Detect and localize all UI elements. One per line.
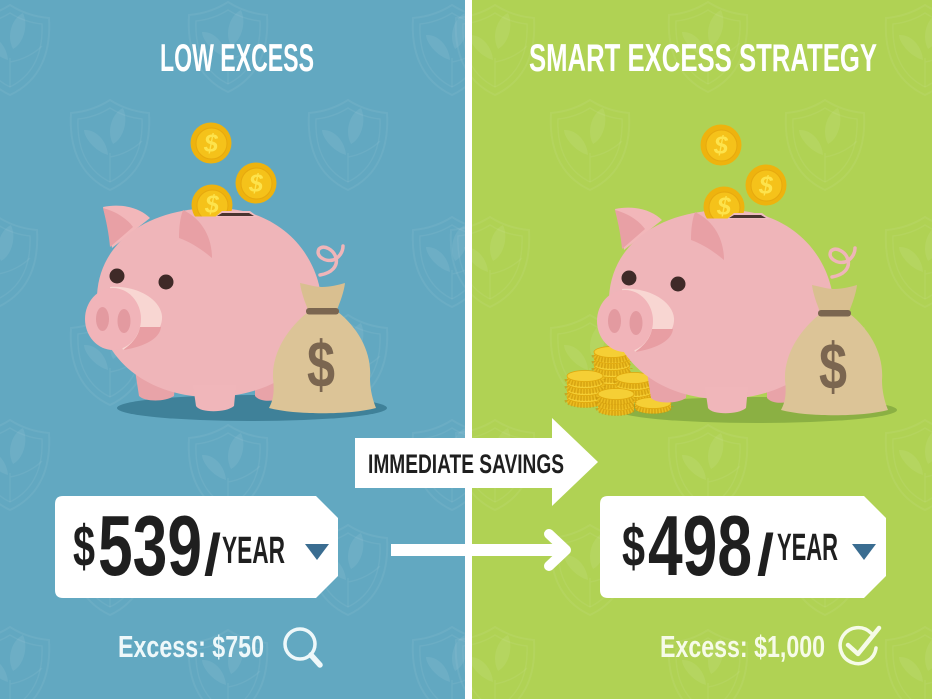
arrow: immediate savings banner (355, 418, 598, 506)
panel: low excess (0, 0, 491, 699)
illustration: piggy bank with coins: $ (204, 191, 220, 219)
illustration: piggy bank with coins: $ (203, 130, 219, 158)
divider (465, 0, 472, 699)
arrow: price comparison (391, 534, 566, 566)
price tag: $539 per year: / (204, 523, 221, 588)
illustration: piggy bank with coins: $ (248, 170, 264, 198)
illustration: piggy bank with coins and stacks: $ (716, 193, 732, 221)
price tag: $498 per year: $ (622, 514, 645, 579)
price tag: $498 per year (600, 496, 886, 598)
label: excess $1,000: Excess: $1,000 (660, 629, 825, 664)
panel: smart excess strategy (451, 0, 932, 699)
label: excess $750: Excess: $750 (118, 629, 264, 664)
background shield pattern (451, 2, 932, 699)
illustration: piggy bank with coins and stacks (567, 124, 897, 423)
illustration: piggy bank with coins and stacks: $ (713, 132, 729, 160)
illustration: piggy bank with coins (85, 122, 387, 421)
coin stacks (567, 346, 671, 416)
heading: low excess: LOW EXCESS (160, 37, 314, 80)
illustration: piggy bank with coins: $ (307, 327, 335, 401)
illustration: piggy bank with coins and stacks: $ (758, 172, 774, 200)
arrow: immediate savings banner: IMMEDIATE SAVINGS (368, 449, 564, 479)
price tag: $539 per year: YEAR (222, 530, 285, 572)
illustration: piggy bank with coins and stacks: $ (819, 329, 847, 403)
price tag: $498 per year: YEAR (777, 527, 838, 569)
price tag: $539 per year (55, 496, 338, 598)
background shield pattern (0, 2, 491, 699)
icon: check mark in circle (840, 628, 879, 664)
price tag: $498 per year: 498 (648, 499, 752, 594)
icon: magnifying glass (285, 629, 320, 665)
price tag: $539 per year: 539 (98, 499, 202, 594)
price tag: $539 per year: $ (73, 514, 95, 579)
price tag: $498 per year: / (757, 523, 774, 588)
